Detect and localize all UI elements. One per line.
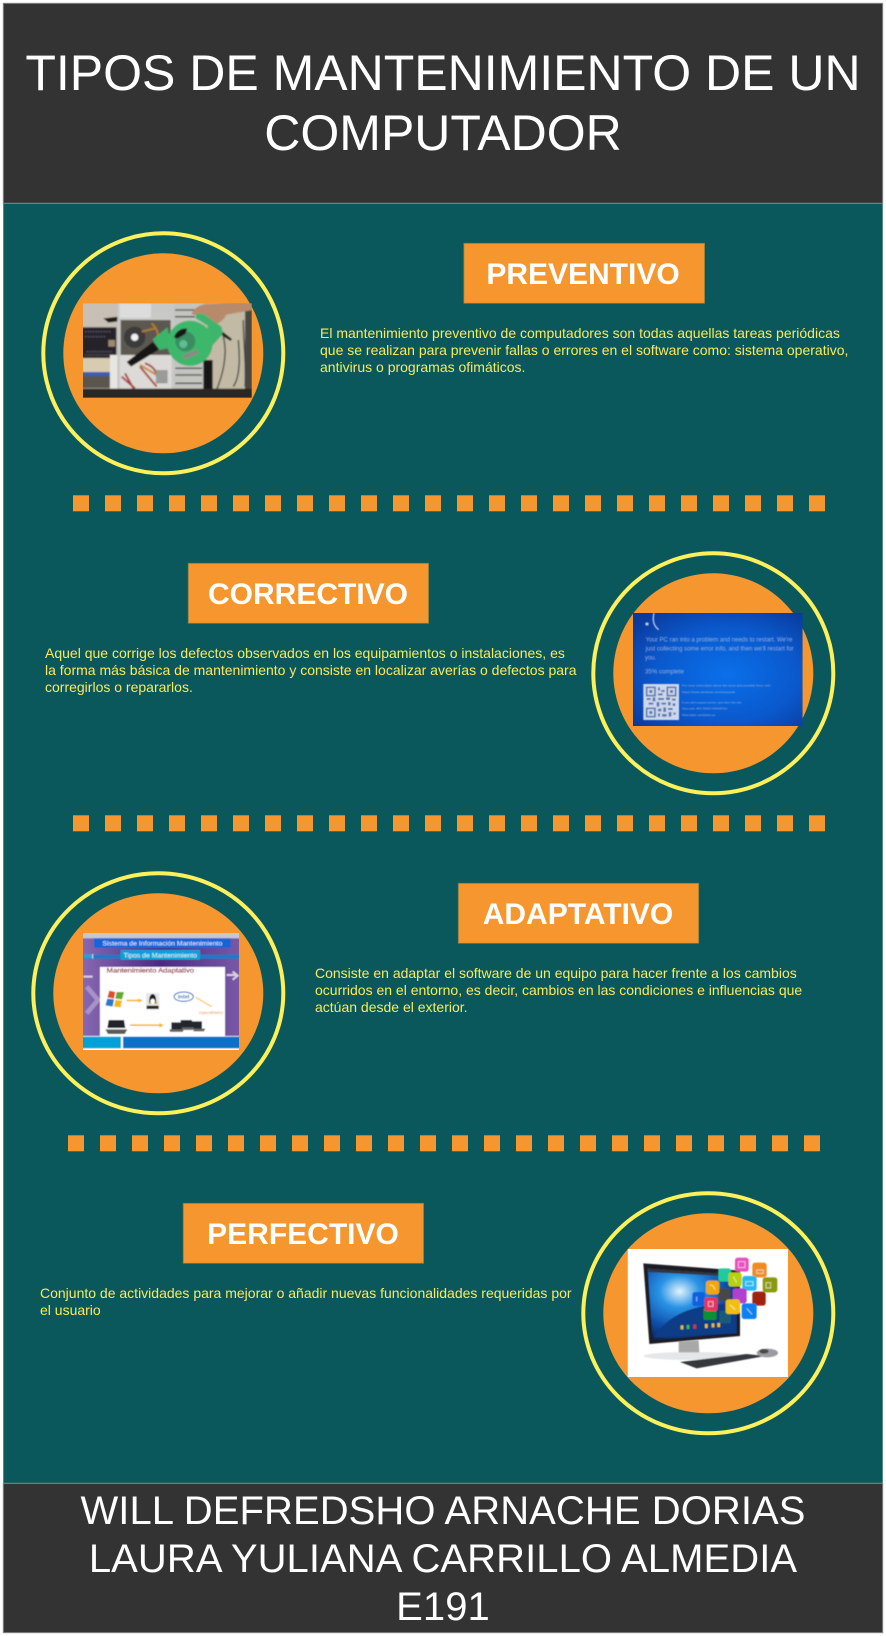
section: correctivo [45, 553, 833, 793]
authors and group code [3, 1487, 883, 1633]
heading: correctivo [188, 563, 429, 625]
photo: adaptive maintenance slide: Mantenimiento Adaptativo [107, 968, 194, 975]
footer panel [3, 1483, 883, 1633]
title: TIPOS DE MANTENIMIENTO DE UN [25, 45, 861, 101]
section: perfectivo [40, 1193, 833, 1433]
photo: blue error screen: Your PC ran into a problem and needs to restart. We're [646, 638, 793, 644]
heading: adaptativo [458, 883, 699, 945]
photo: adaptive maintenance slide: Sistema de Información Mantenimiento [102, 940, 223, 947]
description: preventivo: que se realizan para prevenir fallas o errores en el software como: sistema operativo, [320, 342, 848, 358]
photo: adaptive maintenance slide [80, 930, 242, 1053]
description: perfectivo [40, 1285, 580, 1319]
main teal background [3, 203, 883, 1483]
heading: preventivo: PREVENTIVO [486, 258, 680, 291]
title: COMPUTADOR [264, 105, 622, 161]
description: adaptativo: ocurridos en el entorno, es decir, cambios en las condiciones e influencias que [315, 982, 802, 998]
description: preventivo [320, 325, 860, 376]
heading: correctivo: CORRECTIVO [208, 578, 408, 611]
ring and circle [593, 553, 833, 793]
section: preventivo [43, 233, 860, 473]
ring and ellipse [583, 1193, 833, 1433]
photo: blue error screen: Stop code: APC INDEX MISMATCH [682, 707, 727, 711]
description: correctivo: Aquel que corrige los defectos observados en los equipamientos o instalaciones, es [45, 645, 565, 661]
description: correctivo: la forma más básica de mantenimiento y consiste en localizar averías o defectos para [45, 662, 576, 678]
authors and group code: E191 [396, 1585, 490, 1629]
description: adaptativo: actúan desde el exterior. [315, 999, 468, 1015]
heading: perfectivo: PERFECTIVO [207, 1218, 399, 1251]
photo: blue error screen: 35% complete [645, 669, 684, 676]
photo: desktop computer with app icons [628, 1249, 788, 1377]
photo: blue error screen: If you call a support person, give them this info: [682, 700, 742, 704]
divider 1 [73, 495, 825, 511]
description: correctivo: corregirlos o repararlos. [45, 679, 193, 695]
description: perfectivo: el usuario [40, 1302, 101, 1318]
description: preventivo: El mantenimiento preventivo de computadores son todas aquellas tareas periódicas [320, 325, 840, 341]
divider 2 [73, 815, 825, 831]
photo: blue error screen: https://www.windows.com/stopcode [682, 690, 736, 694]
section: adaptativo [33, 873, 835, 1113]
description: correctivo [45, 645, 590, 696]
ring and circle [43, 233, 283, 473]
photo: blue error screen: What failed: win32kfull.sys [682, 713, 716, 717]
photo: blue error screen [633, 613, 803, 726]
heading: perfectivo [183, 1203, 424, 1265]
photo: blue error screen: just collecting some error info, and then we'll restart for [645, 647, 794, 653]
photo: adaptive maintenance slide: OpenSPARC [199, 1011, 224, 1015]
photo: blue error screen: For more information about this issue and possible fixes, visit [682, 684, 771, 688]
description: adaptativo: Consiste en adaptar el software de un equipo para hacer frente a los cambios [315, 965, 797, 981]
ring and ellipse [33, 873, 283, 1113]
title [3, 43, 883, 163]
photo: adaptive maintenance slide: Tipos de Mantenimiento [124, 952, 197, 959]
photo: adaptive maintenance slide: intel [178, 995, 190, 1001]
authors and group code: WILL DEFREDSHO ARNACHE DORIAS [80, 1489, 806, 1533]
description: adaptativo [315, 965, 835, 1016]
photo: blower cleaning a computer case [80, 300, 255, 400]
header panel [3, 3, 883, 203]
heading: adaptativo: ADAPTATIVO [483, 898, 673, 931]
divider 3 [68, 1135, 820, 1151]
description: perfectivo: Conjunto de actividades para mejorar o añadir nuevas funcionalidades requeridas por [40, 1285, 572, 1301]
heading: preventivo [463, 243, 705, 305]
photo: blue error screen: you. [645, 655, 657, 661]
description: preventivo: antivirus o programas ofimáticos. [320, 359, 525, 375]
authors and group code: LAURA YULIANA CARRILLO ALMEDIA [89, 1537, 797, 1581]
